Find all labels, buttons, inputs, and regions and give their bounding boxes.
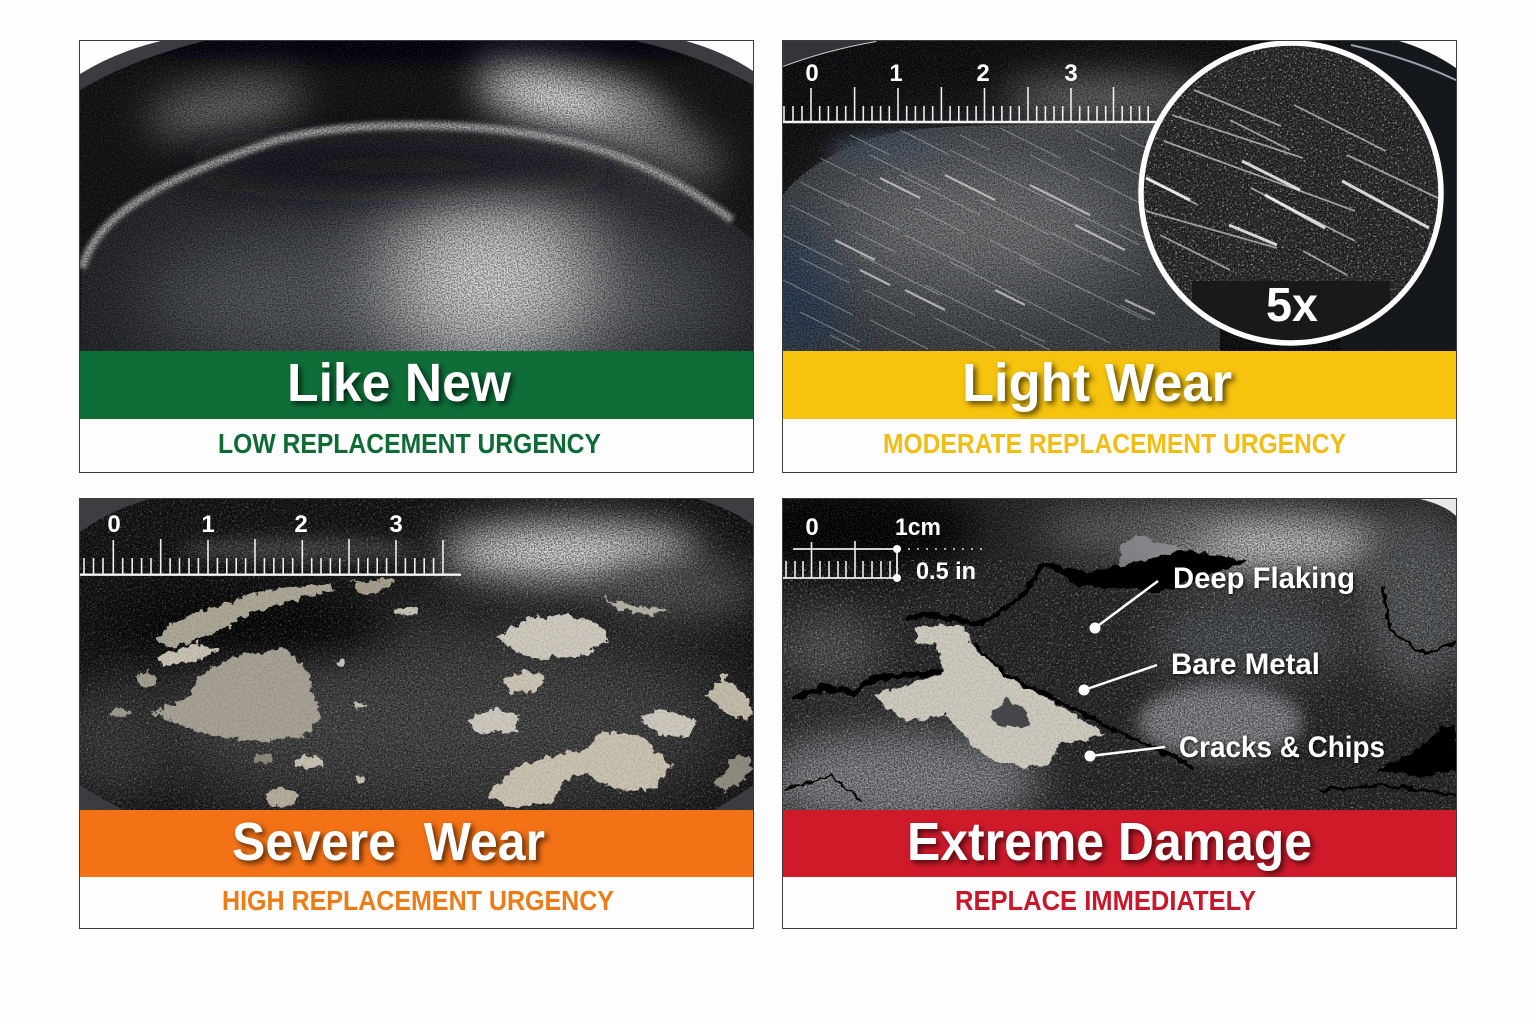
ruler: 2 — [294, 511, 308, 538]
zoom label: 5x — [1266, 279, 1318, 332]
scale bar: 1cm — [895, 514, 941, 541]
paint flakes — [109, 578, 751, 808]
urgency label: MODERATE REPLACEMENT URGENCY — [883, 428, 1346, 459]
panel: severe wear — [50, 498, 760, 928]
ruler: 2 — [976, 60, 990, 87]
zoom label strip — [1192, 281, 1390, 340]
panel: extreme damage — [782, 498, 1457, 929]
callout: cracks and chips: Cracks & Chips — [1179, 731, 1385, 764]
urgency block — [80, 419, 753, 472]
title: extreme damage: Extreme Damage — [907, 812, 1312, 872]
ruler: 0 — [805, 60, 819, 87]
callout: cracks and chips — [1084, 731, 1385, 764]
panel frame — [80, 498, 754, 928]
status band: light wear — [783, 351, 1456, 419]
photo: clean pan — [80, 41, 753, 351]
ruler — [80, 511, 461, 575]
title: severe wear: Severe Wear — [232, 812, 545, 872]
magnifier: 5x zoom — [1135, 38, 1450, 351]
status band: severe wear — [80, 810, 753, 877]
photo: destroyed coating — [783, 499, 1456, 810]
scale bar — [783, 514, 985, 585]
photo: flaking pan — [50, 499, 760, 820]
scratches on the pan — [783, 128, 1150, 350]
status band: extreme damage — [783, 810, 1456, 877]
status band: like new — [80, 351, 753, 419]
urgency block — [783, 877, 1456, 928]
callout: bare metal: Bare Metal — [1171, 648, 1320, 681]
ruler: 1 — [889, 60, 903, 87]
panel: light wear — [750, 38, 1458, 472]
panel frame — [782, 40, 1456, 472]
ruler: 3 — [389, 511, 403, 538]
ruler — [783, 60, 1165, 122]
ruler: 1 — [201, 511, 215, 538]
infographic: pan wear grid — [79, 40, 1457, 929]
flake edge — [1120, 535, 1185, 567]
urgency block — [783, 419, 1456, 472]
callout: deep flaking: Deep Flaking — [1173, 562, 1355, 595]
panel frame — [80, 40, 754, 472]
panel: like new — [80, 32, 754, 472]
scale bar: 0 — [805, 514, 819, 541]
urgency label: HIGH REPLACEMENT URGENCY — [222, 885, 614, 916]
ruler: 0 — [107, 511, 121, 538]
photo: scratched pan — [750, 41, 1458, 360]
cracks — [783, 550, 1456, 800]
scale bar: 0.5 in — [916, 558, 976, 585]
title: light wear: Light Wear — [962, 353, 1232, 413]
callout: deep flaking — [1090, 562, 1355, 634]
title: like new: Like New — [287, 353, 512, 413]
panel frame — [782, 498, 1456, 928]
bare metal patch — [872, 625, 1107, 768]
urgency label: LOW REPLACEMENT URGENCY — [218, 428, 601, 459]
urgency block — [80, 877, 753, 928]
ruler: 3 — [1064, 60, 1078, 87]
urgency label: REPLACE IMMEDIATELY — [955, 885, 1256, 916]
callout: bare metal — [1078, 648, 1320, 696]
